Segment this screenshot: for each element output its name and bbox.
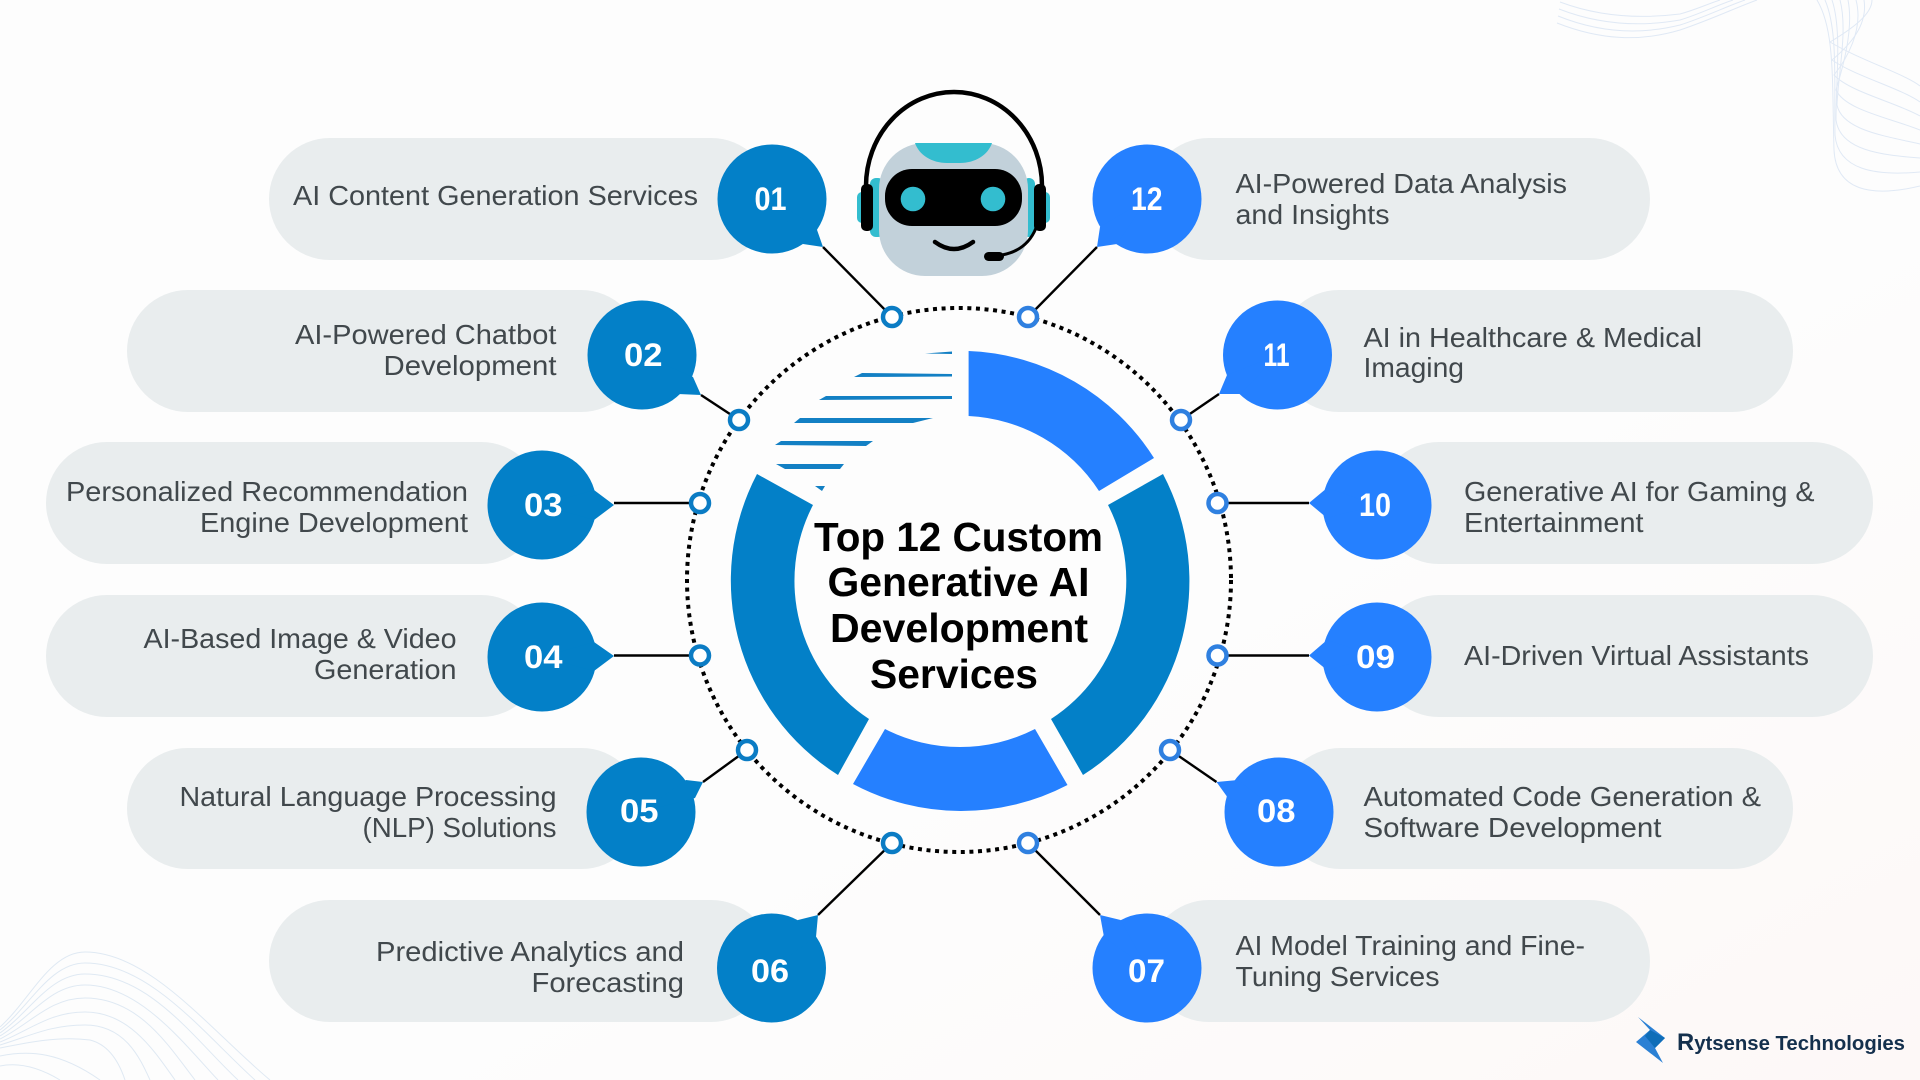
pill — [1278, 290, 1793, 412]
number: 04 — [524, 639, 563, 675]
connector — [1028, 843, 1100, 915]
label: AI-Powered Chatbot — [295, 319, 557, 350]
donut segment: left — [731, 474, 869, 775]
number badge — [1309, 602, 1432, 712]
pill — [127, 748, 642, 869]
label: (NLP) Solutions — [362, 812, 556, 843]
service 05 — [127, 741, 756, 869]
number badge — [1309, 450, 1432, 560]
label: Generative AI for Gaming & — [1464, 476, 1814, 507]
title — [814, 514, 1103, 697]
label: Natural Language Processing — [180, 781, 556, 812]
connector — [1181, 394, 1219, 420]
number badge — [1216, 758, 1334, 866]
title: Development — [830, 605, 1088, 651]
pill — [1148, 138, 1650, 260]
number: 09 — [1356, 639, 1395, 675]
pill — [46, 442, 542, 564]
number: 08 — [1257, 793, 1296, 829]
donut chart — [731, 351, 1189, 811]
node — [1172, 411, 1190, 429]
pill — [269, 138, 772, 260]
label: Software Development — [1364, 812, 1662, 843]
label: Imaging — [1364, 352, 1464, 383]
node — [1208, 646, 1226, 664]
number: 06 — [751, 953, 789, 989]
connector — [614, 502, 700, 504]
number: 01 — [754, 181, 786, 217]
donut segment: bottom — [853, 729, 1068, 811]
title: Generative AI — [828, 559, 1090, 605]
number badge — [1219, 300, 1332, 410]
label: Predictive Analytics and — [376, 936, 684, 967]
node — [738, 741, 756, 759]
logo text: Rytsense Technologies — [1677, 1029, 1905, 1056]
service 07 — [1019, 834, 1650, 1022]
node — [691, 494, 709, 512]
label: Entertainment — [1464, 507, 1644, 538]
number badge — [718, 144, 826, 254]
label: Forecasting — [532, 967, 684, 998]
pill — [1378, 442, 1873, 564]
logo: Rytsense Technologies — [1636, 1017, 1905, 1063]
node — [883, 834, 901, 852]
label: Personalized Recommendation — [66, 476, 468, 507]
node — [1019, 308, 1037, 326]
number: 11 — [1264, 337, 1290, 373]
decorative wave lines: top right — [1557, 0, 1920, 191]
logo mark — [1636, 1017, 1665, 1063]
node — [691, 646, 709, 664]
title: Top 12 Custom — [814, 514, 1103, 560]
pill — [1280, 748, 1793, 869]
connector — [1028, 247, 1097, 317]
number badge — [588, 300, 701, 410]
number: 03 — [524, 487, 562, 523]
label: Development — [384, 350, 557, 381]
pill — [127, 290, 642, 412]
label: Automated Code Generation & — [1364, 781, 1761, 812]
node — [730, 411, 748, 429]
node — [1208, 494, 1226, 512]
service 12 — [1019, 138, 1650, 326]
number: 12 — [1131, 181, 1162, 217]
connector — [614, 654, 700, 657]
label: AI in Healthcare & Medical — [1364, 322, 1702, 353]
donut segment: right — [1051, 474, 1189, 775]
number badge — [1092, 914, 1202, 1022]
icon: robot with headset — [857, 92, 1050, 276]
node — [1161, 741, 1179, 759]
number: 07 — [1128, 953, 1165, 989]
service 11 — [1172, 290, 1793, 429]
connector — [1218, 502, 1309, 504]
connector — [1218, 654, 1309, 657]
donut segment: top right — [969, 351, 1154, 491]
number badge — [488, 602, 614, 712]
pill — [269, 900, 772, 1022]
label: and Insights — [1236, 199, 1390, 230]
service 02 — [127, 290, 748, 429]
title: Services — [870, 651, 1038, 697]
connector — [818, 843, 892, 915]
label: AI-Driven Virtual Assistants — [1464, 640, 1809, 671]
connector — [1170, 750, 1216, 782]
number badge — [1092, 144, 1202, 254]
label: Generation — [314, 654, 456, 685]
node — [883, 308, 901, 326]
number badge — [717, 914, 826, 1022]
label: Engine Development — [200, 507, 468, 538]
connector — [701, 395, 739, 420]
service 09 — [1208, 595, 1873, 717]
number: 10 — [1359, 487, 1391, 523]
node — [1019, 834, 1037, 852]
label: AI Content Generation Services — [293, 180, 698, 211]
number: 02 — [624, 337, 662, 373]
service 04 — [46, 595, 709, 717]
dotted ring — [687, 308, 1231, 852]
connector — [703, 750, 747, 782]
pill — [1378, 595, 1873, 717]
number badge — [488, 450, 614, 560]
service 06 — [269, 834, 901, 1022]
service 08 — [1161, 741, 1793, 869]
number: 05 — [620, 793, 658, 829]
label: AI-Based Image & Video — [144, 623, 456, 654]
service 03 — [46, 442, 709, 564]
label: AI Model Training and Fine- — [1236, 930, 1585, 961]
pill — [1148, 900, 1650, 1022]
label: Tuning Services — [1236, 961, 1440, 992]
connector — [823, 247, 892, 317]
donut segment: striped top left — [775, 352, 952, 491]
service 01 — [269, 138, 901, 326]
label: AI-Powered Data Analysis — [1236, 168, 1567, 199]
decorative wave lines: bottom left — [0, 952, 270, 1080]
pill — [46, 595, 542, 717]
service 10 — [1208, 442, 1873, 564]
number badge — [586, 758, 703, 866]
